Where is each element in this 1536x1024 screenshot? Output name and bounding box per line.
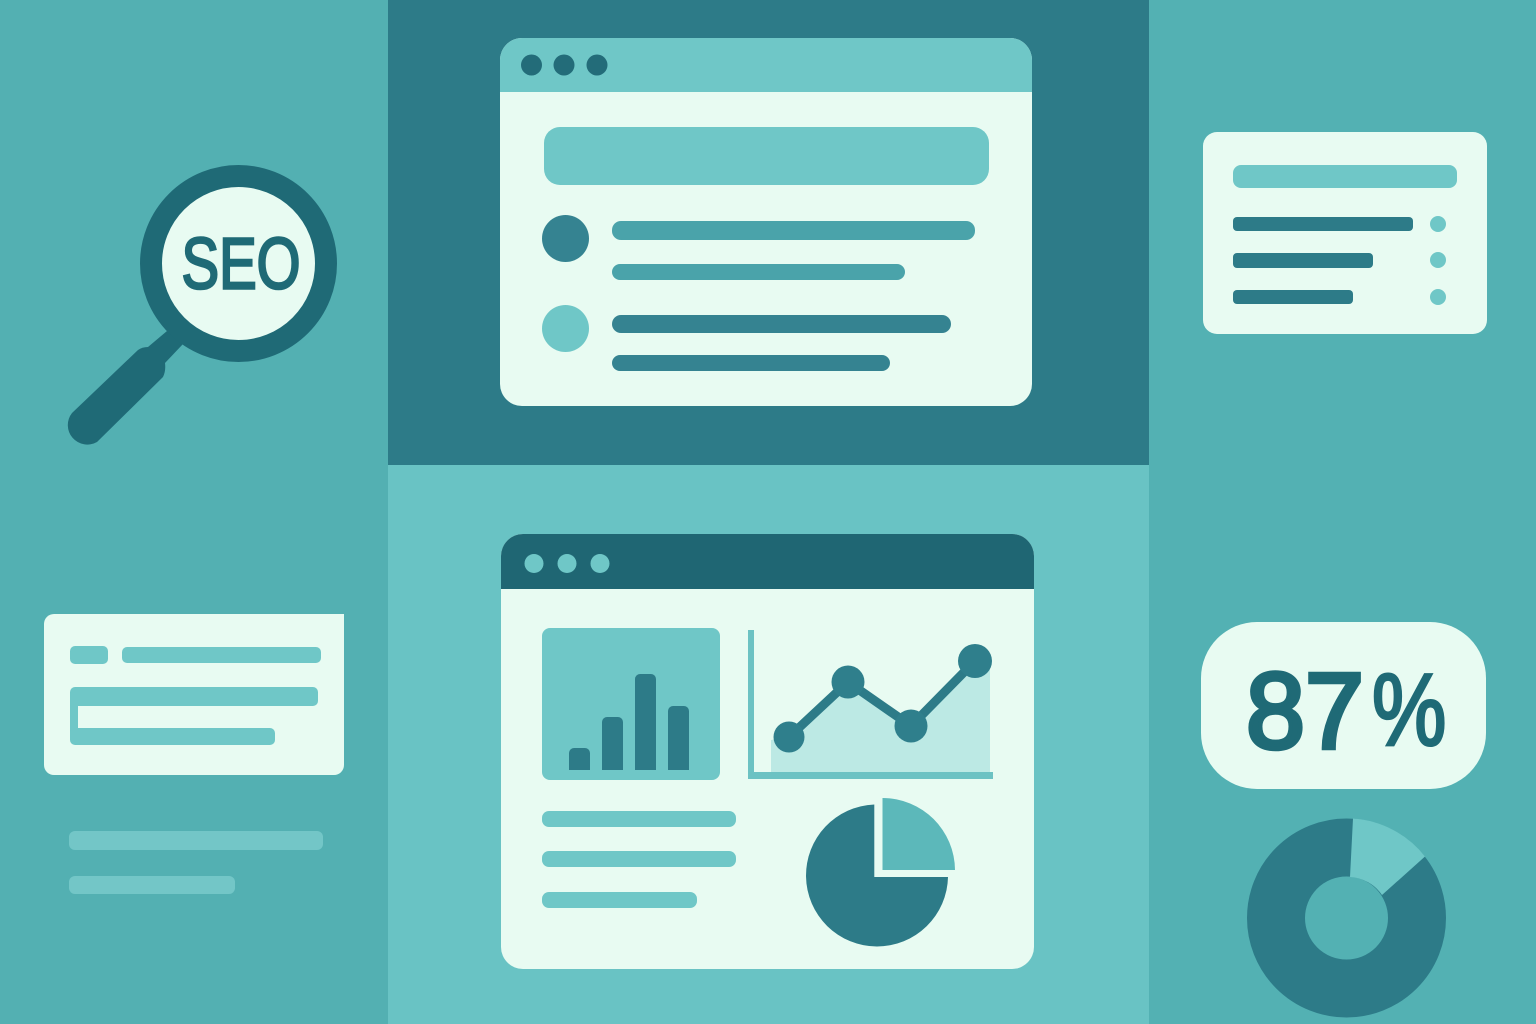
small tag: [70, 646, 108, 664]
card header bar: [1233, 165, 1457, 188]
panel: top browser window: [500, 38, 1032, 406]
list row three: [1233, 289, 1446, 305]
faded text line one: [69, 831, 323, 850]
panel: 87 percent badge: [1201, 622, 1486, 789]
panel: left column background: [0, 0, 388, 1024]
result row two: [542, 305, 951, 371]
percent value digits: 87: [1246, 650, 1364, 771]
highlighted text block: [70, 687, 318, 745]
result row one: [542, 215, 975, 280]
window control dots: [521, 54, 608, 76]
icon: SEO magnifying glass: [68, 176, 326, 445]
text lines: [542, 811, 736, 908]
panel: top right list card: [1203, 132, 1487, 334]
percent sign: %: [1372, 653, 1446, 767]
faded text line two: [69, 876, 235, 894]
panel: top centre dark background: [388, 0, 1149, 465]
chart: pie: [806, 798, 955, 946]
heading bar: [122, 647, 321, 663]
dashboard window dots: [524, 554, 610, 573]
SEO label: SEO: [182, 224, 300, 304]
panel: dashboard browser window: [501, 534, 1034, 969]
dashboard title bar: [501, 534, 1034, 589]
chart: donut: [1276, 818, 1425, 988]
list row one: [1233, 216, 1446, 232]
browser title bar: [500, 38, 1032, 92]
bar chart: [542, 628, 720, 780]
panel: right column background: [1149, 0, 1536, 1024]
line chart: [748, 630, 993, 779]
list row two: [1233, 252, 1446, 268]
search bar: [544, 127, 989, 185]
panel: bottom centre light background: [388, 465, 1149, 1024]
panel: left text card: [44, 614, 344, 775]
